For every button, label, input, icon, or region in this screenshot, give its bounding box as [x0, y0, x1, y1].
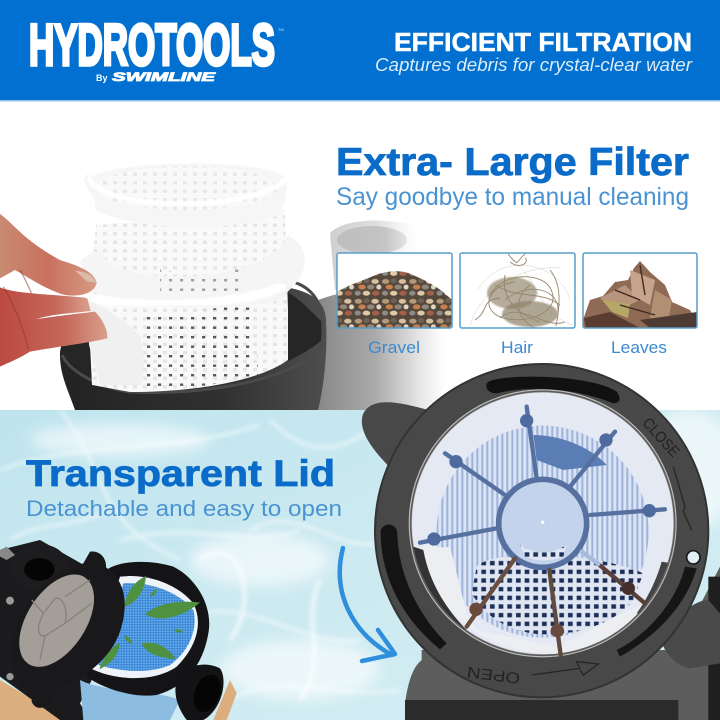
product photo: pump with open lid — [0, 540, 237, 720]
lid handle — [362, 402, 428, 466]
header heading: EFFICIENT FILTRATION — [394, 27, 692, 57]
hub — [499, 479, 587, 567]
large transparent lid close-up — [362, 364, 720, 720]
pump bowl — [60, 281, 326, 410]
inlet fitting — [10, 544, 69, 591]
label: hair: Hair — [501, 338, 533, 357]
lens — [409, 389, 677, 657]
index finger — [0, 214, 97, 296]
label: gravel: Gravel — [368, 338, 420, 357]
wooden base — [0, 680, 237, 720]
panel: hair sample — [460, 253, 575, 357]
bolts — [6, 597, 14, 605]
brand logo — [29, 13, 284, 84]
header banner — [0, 0, 720, 102]
basket interior — [91, 576, 198, 678]
arrow pointing to the lid — [340, 548, 395, 661]
embossed CLOSE text: CLOSE — [639, 415, 683, 461]
top slot — [486, 377, 620, 403]
pump lower body — [0, 540, 100, 720]
outer ring — [375, 364, 708, 697]
spokes — [420, 407, 665, 655]
brand logo: TM — [278, 27, 284, 32]
label: leaves: Leaves — [611, 338, 667, 357]
outlet fitting — [175, 665, 224, 720]
open lid ring — [12, 551, 125, 708]
pump body below lid — [405, 567, 720, 720]
embossed arrows — [532, 467, 692, 675]
right slot — [617, 567, 697, 657]
header subheading: Captures debris for crystal-clear water — [375, 55, 693, 75]
hand holding the basket — [0, 214, 107, 367]
green leaves — [99, 576, 200, 669]
strainer ring — [87, 562, 209, 696]
brand logo: HYDROTOOLS — [29, 13, 275, 78]
filter basket — [80, 161, 305, 392]
panel: leaves sample — [583, 253, 697, 357]
panel: pool water background — [0, 410, 720, 720]
grey pump housing behind filter — [318, 218, 445, 410]
brand logo: SWIMLINE — [112, 70, 217, 84]
lid lens — [4, 561, 109, 680]
subheading: detachable: Detachable and easy to open — [26, 496, 342, 521]
heading: extra-large filter: Extra- Large Filter — [336, 141, 689, 184]
ring finger — [0, 312, 107, 367]
heading: transparent lid: Transparent Lid — [26, 453, 335, 494]
panel: gravel sample — [337, 253, 452, 357]
middle finger — [0, 287, 91, 323]
embossed OPEN text: OPEN — [466, 663, 521, 686]
brand logo: By — [96, 73, 108, 83]
left slot — [381, 525, 447, 649]
subheading: manual cleaning: Say goodbye to manual cleaning — [336, 183, 689, 211]
spoke nodes — [427, 414, 656, 637]
